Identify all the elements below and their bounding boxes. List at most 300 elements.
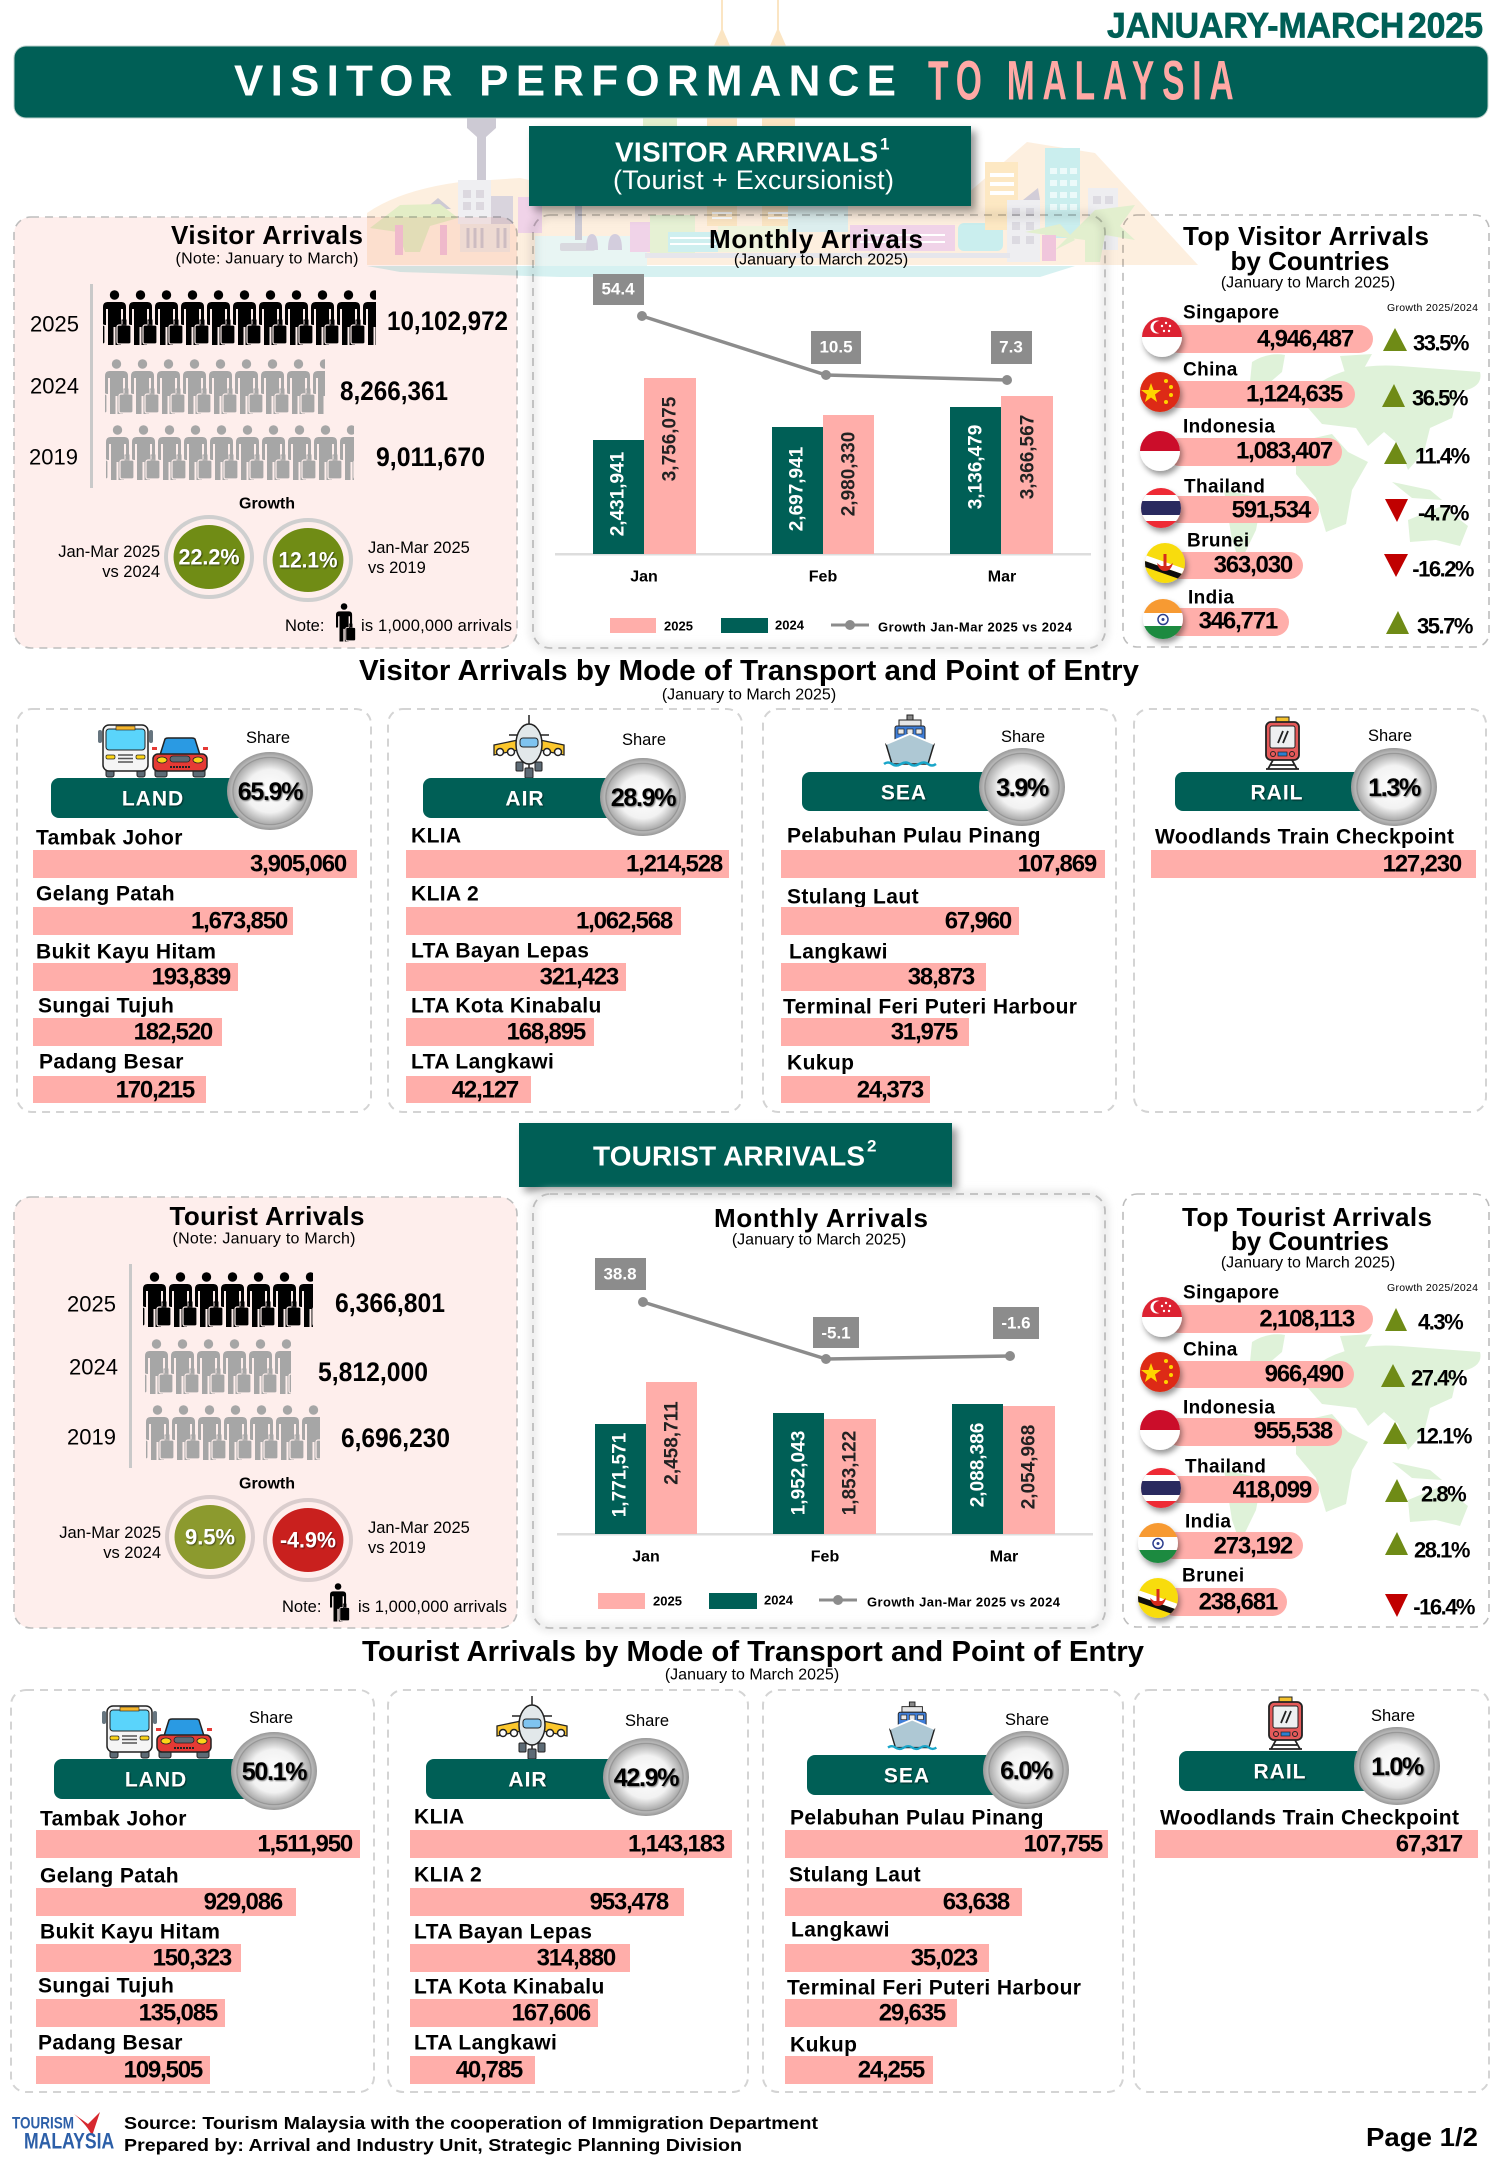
- panel content: visitor arrivals totals: [29, 220, 512, 642]
- icon: train: [1266, 717, 1299, 769]
- list: land entry points: Padang Besar: [39, 1050, 184, 1074]
- row: Thailand: Thailand: [1185, 1456, 1266, 1478]
- growth badges: [58, 496, 470, 600]
- icon: ship: [888, 1702, 936, 1749]
- list: sea entry points: Terminal Feri Puteri Harbour: [787, 1976, 1081, 2000]
- air badge: [426, 1738, 689, 1816]
- world map background: [1224, 1334, 1481, 1543]
- row: 2024 pictogram: 8,266,361: [340, 376, 448, 406]
- rail badge: [1179, 1727, 1440, 1805]
- note: pictogram key: [285, 603, 512, 642]
- list: sea entry points: 35,023: [911, 1944, 978, 1972]
- list: sea entry points: 67,960: [945, 908, 1012, 934]
- growth badges: Jan-Mar 2025: [368, 539, 470, 557]
- section heading: tourist arrivals: [519, 1123, 952, 1187]
- list: air entry points: 42,127: [452, 1076, 519, 1104]
- logo: Tourism Malaysia: MALAYSIA: [24, 2130, 114, 2154]
- panel: visitor sea: Share: [1001, 728, 1045, 746]
- row: Singapore: [1142, 1282, 1463, 1337]
- list: sea entry points: Langkawi: [789, 940, 888, 964]
- row: Indonesia: Indonesia: [1183, 1398, 1275, 1418]
- growth badges: Growth: [239, 1476, 295, 1492]
- source text: [124, 2113, 818, 2155]
- list: sea entry points: Terminal Feri Puteri Harbour: [783, 996, 1077, 1018]
- list: air entry points: LTA Kota Kinabalu: [414, 1976, 605, 1998]
- heading: tourist arrivals by mode: [362, 1636, 1144, 1684]
- row: Brunei: 238,681: [1199, 1588, 1278, 1616]
- rail badge: 1.0%: [1371, 1753, 1424, 1781]
- row: 2024 pictogram: 5,812,000: [318, 1357, 428, 1387]
- list: land entry points: Sungai Tujuh: [38, 1974, 174, 1998]
- list: land entry points: 1,511,950: [257, 1830, 353, 1858]
- row: Thailand: 2.8%: [1421, 1482, 1466, 1506]
- panel: tourist sea: [763, 1690, 1123, 2092]
- list: air entry points: KLIA: [411, 824, 462, 848]
- list: air entry points: 168,895: [507, 1018, 586, 1046]
- title banner: [14, 46, 1488, 118]
- section heading: visitor arrivals: VISITOR ARRIVALS: [615, 136, 878, 168]
- chart: monthly visitor arrivals: Jan: [630, 568, 658, 586]
- growth badges: vs 2019: [368, 1539, 426, 1557]
- chart: monthly tourist arrivals: Feb: [811, 1548, 839, 1566]
- panel content: top visitor countries: [1140, 221, 1478, 640]
- chart: monthly tourist arrivals: Jan: [632, 1548, 660, 1566]
- row: Indonesia: [1140, 1398, 1472, 1450]
- list: land entry points: Sungai Tujuh: [38, 994, 174, 1018]
- legend: Growth Jan-Mar 2025 vs 2024: [878, 620, 1073, 634]
- row: India: India: [1185, 1512, 1231, 1532]
- row: India: 28.1%: [1414, 1538, 1470, 1562]
- page number: Page 1/2: [1366, 2122, 1478, 2152]
- icon: bus and car: [98, 725, 208, 777]
- world map background: [1224, 354, 1481, 563]
- row: 2024 pictogram: 2024: [69, 1354, 118, 1380]
- legend: 2024: [764, 1592, 794, 1608]
- list: air entry points: 167,606: [512, 2000, 591, 2026]
- icon: plane: [494, 715, 564, 778]
- list: sea entry points: Pelabuhan Pulau Pinang: [787, 824, 1041, 848]
- bars: January: 2,458,711: [662, 1401, 682, 1485]
- bars: March: 2,054,968: [1018, 1425, 1040, 1509]
- bars: March: 3,136,479: [966, 425, 986, 509]
- list: air entry points: KLIA 2: [411, 882, 479, 906]
- list: land entry points: Gelang Patah: [36, 882, 175, 906]
- row: Brunei: 363,030: [1214, 552, 1293, 578]
- list: sea entry points: 107,869: [1018, 850, 1097, 878]
- row: Singapore: 4.3%: [1418, 1310, 1463, 1334]
- growth line: [593, 274, 1032, 385]
- row: India: 273,192: [1214, 1532, 1293, 1560]
- growth line: 54.4: [601, 280, 635, 298]
- row: China: China: [1183, 1340, 1238, 1360]
- land badge: [54, 1732, 317, 1810]
- bars: February: 1,853,122: [840, 1431, 860, 1515]
- list: sea entry points: [785, 1806, 1108, 2084]
- panel: visitor land: [17, 709, 371, 1112]
- growth badges: Jan-Mar 2025: [58, 543, 160, 561]
- list: air entry points: 321,423: [540, 964, 619, 990]
- list: rail entry point: Woodlands Train Checkpoint: [1160, 1806, 1459, 1830]
- growth badges: -4.9%: [280, 1528, 336, 1552]
- bars: February: 2,980,330: [838, 432, 860, 516]
- list: land entry points: [36, 1808, 360, 2084]
- row: Brunei: -16.4%: [1413, 1594, 1475, 1620]
- list: air entry points: [406, 824, 729, 1104]
- row: Indonesia: 1,083,407: [1236, 438, 1333, 464]
- note: pictogram key: is 1,000,000 arrivals: [361, 617, 512, 635]
- list: sea entry points: 29,635: [879, 2000, 946, 2026]
- panel: top tourist countries: Top Tourist Arrivals: [1182, 1202, 1432, 1232]
- list: air entry points: 314,880: [537, 1944, 616, 1972]
- land badge: LAND: [122, 788, 184, 810]
- growth line: 10.5: [819, 338, 853, 356]
- legend: 2025: [653, 1594, 682, 1608]
- list: sea entry points: 31,975: [891, 1018, 958, 1046]
- air badge: 28.9%: [611, 784, 676, 812]
- list: air entry points: 1,062,568: [576, 908, 673, 934]
- panel: monthly visitor arrivals background: [533, 215, 1105, 648]
- date heading: JANUARY-MARCH 2025: [1107, 6, 1483, 46]
- sea badge: 6.0%: [1000, 1757, 1053, 1785]
- list: land entry points: Tambak Johor: [40, 1808, 187, 1830]
- icon: train: [1269, 1697, 1302, 1749]
- note: pictogram key: is 1,000,000 arrivals: [358, 1598, 507, 1616]
- panel: top tourist countries: [1123, 1194, 1489, 1627]
- panel: visitor air: Share: [622, 731, 666, 749]
- list: sea entry points: 24,255: [858, 2056, 925, 2084]
- chart: monthly tourist arrivals: (January to March 2025): [732, 1232, 906, 1248]
- section heading: visitor arrivals: (Tourist + Excursionist): [613, 165, 894, 195]
- row: China: 27.4%: [1411, 1366, 1467, 1390]
- row: Singapore: [1142, 302, 1469, 357]
- source text: Prepared by: Arrival and Industry Unit, Strategic Planning Division: [124, 2135, 742, 2155]
- panel: visitor rail: [1134, 709, 1486, 1112]
- row: Singapore: 2,108,113: [1259, 1306, 1355, 1332]
- growth line: -5.1: [821, 1324, 851, 1342]
- section heading: visitor arrivals: [529, 126, 971, 206]
- list: air entry points: 40,785: [456, 2056, 523, 2084]
- bars: February: [773, 1413, 876, 1534]
- row: China: 1,124,635: [1246, 380, 1343, 408]
- list: land entry points: 109,505: [124, 2056, 203, 2084]
- list: air entry points: 953,478: [590, 1888, 669, 1916]
- list: air entry points: LTA Bayan Lepas: [414, 1920, 592, 1944]
- heading: visitor arrivals by mode: (January to March 2025): [662, 686, 836, 704]
- bars: February: [772, 415, 874, 554]
- panel: tourist sea: Share: [1005, 1711, 1049, 1729]
- list: sea entry points: Stulang Laut: [789, 1864, 921, 1886]
- growth badges: vs 2019: [368, 559, 426, 577]
- chart: monthly visitor arrivals: (January to March 2025): [734, 252, 908, 268]
- row: 2025 pictogram: 2025: [30, 312, 79, 336]
- list: air entry points: LTA Bayan Lepas: [411, 940, 589, 962]
- row: Brunei: Brunei: [1182, 1566, 1245, 1586]
- list: land entry points: 150,323: [153, 1944, 232, 1972]
- list: air entry points: 1,143,183: [628, 1830, 725, 1858]
- growth line: 38.8: [603, 1264, 637, 1284]
- air badge: [423, 758, 686, 836]
- sea badge: [807, 1731, 1069, 1809]
- list: land entry points: 1,673,850: [191, 908, 288, 934]
- growth line: [595, 1258, 1039, 1364]
- row: Indonesia: 955,538: [1254, 1418, 1333, 1444]
- panel: top tourist countries: (January to March 2025): [1221, 1254, 1395, 1272]
- list: land entry points: 193,839: [152, 964, 231, 990]
- panel: tourist rail: Share: [1371, 1707, 1415, 1725]
- note: pictogram key: [282, 1583, 507, 1622]
- panel: tourist rail: [1134, 1690, 1489, 2092]
- section heading: visitor arrivals: 1: [880, 134, 889, 154]
- row: China: 966,490: [1265, 1360, 1344, 1388]
- growth badges: 9.5%: [185, 1524, 235, 1550]
- panel content: visitor arrivals totals: Visitor Arrivals: [171, 220, 363, 250]
- chart: monthly tourist arrivals: [533, 1194, 1105, 1628]
- growth badges: 12.1%: [278, 548, 338, 572]
- row: 2024 pictogram: 2024: [30, 374, 79, 398]
- bars: March: [950, 396, 1053, 554]
- heading: visitor arrivals by mode: Visitor Arrivals by Mode of Transport and Point of Entry: [359, 655, 1139, 687]
- row: Indonesia: [1140, 416, 1470, 471]
- growth line: -1.6: [1001, 1314, 1031, 1332]
- land badge: [51, 752, 313, 830]
- panel content: visitor arrivals totals: (Note: January to March): [176, 250, 358, 268]
- sea badge: 3.9%: [996, 774, 1049, 802]
- row: Brunei: Brunei: [1187, 530, 1250, 552]
- bars: March: [952, 1404, 1055, 1534]
- bars: March: 2,088,386: [968, 1423, 988, 1507]
- row: Brunei: [1145, 530, 1474, 583]
- growth badges: vs 2024: [102, 563, 160, 581]
- list: land entry points: Gelang Patah: [40, 1864, 179, 1888]
- row: 2019 pictogram: 2019: [67, 1424, 116, 1450]
- row: Singapore: 4,946,487: [1257, 326, 1354, 352]
- row: Brunei: -16.2%: [1412, 556, 1474, 582]
- list: rail entry point: Woodlands Train Checkpoint: [1155, 826, 1454, 848]
- sea badge: [802, 748, 1065, 826]
- title banner: TO MALAYSIA: [928, 48, 1241, 112]
- row: 2025 pictogram: 10,102,972: [387, 306, 508, 336]
- note: pictogram key: Note:: [285, 617, 324, 635]
- row: China: China: [1183, 360, 1238, 380]
- panel content: top visitor countries: by Countries: [1230, 246, 1390, 276]
- panel: top tourist countries: by Countries: [1231, 1226, 1389, 1256]
- rail badge: 1.3%: [1368, 774, 1421, 802]
- list: land entry points: 182,520: [134, 1018, 213, 1046]
- row: 2025 pictogram: 2025: [67, 1292, 116, 1316]
- panel content: top visitor countries: Top Visitor Arrivals: [1183, 221, 1429, 251]
- growth line: 7.3: [999, 338, 1023, 356]
- row: Thailand: Thailand: [1184, 476, 1265, 498]
- row: 2025 pictogram: [30, 290, 508, 346]
- panel: tourist arrivals totals: (Note: January to March): [172, 1230, 356, 1248]
- row: Thailand: -4.7%: [1418, 500, 1469, 526]
- bars: March: 3,366,567: [1018, 415, 1038, 499]
- growth badges: Jan-Mar 2025: [368, 1519, 470, 1537]
- list: rail entry point: 67,317: [1396, 1830, 1463, 1858]
- panel: visitor rail: Share: [1368, 727, 1412, 745]
- panel: tourist land: Share: [249, 1709, 293, 1727]
- list: land entry points: 3,905,060: [250, 850, 347, 878]
- panel: tourist air: Share: [625, 1712, 669, 1730]
- list: air entry points: LTA Langkawi: [414, 2032, 557, 2054]
- panel: top visitor countries background: [1123, 215, 1489, 647]
- chart: monthly visitor arrivals: Monthly Arrivals: [709, 224, 923, 254]
- row: India: 35.7%: [1417, 614, 1473, 638]
- row: China: 36.5%: [1412, 386, 1468, 410]
- panel: visitor sea: [763, 709, 1116, 1112]
- row: India: [1143, 588, 1473, 640]
- list: sea entry points: Pelabuhan Pulau Pinang: [790, 1806, 1044, 1830]
- bars: January: [595, 1382, 697, 1534]
- list: land entry points: [33, 826, 357, 1104]
- row: 2019 pictogram: [29, 425, 485, 481]
- icon: ship: [884, 715, 936, 766]
- panel: visitor land: Share: [246, 729, 290, 747]
- sea badge: SEA: [881, 782, 927, 804]
- heading: tourist arrivals by mode: (January to March 2025): [665, 1666, 839, 1684]
- air badge: AIR: [508, 1768, 548, 1792]
- row: Indonesia: 12.1%: [1416, 1424, 1472, 1448]
- legend: 2025: [664, 618, 693, 634]
- list: air entry points: LTA Kota Kinabalu: [411, 994, 602, 1018]
- row: Singapore: 33.5%: [1413, 330, 1469, 356]
- row: Singapore: Singapore: [1183, 1282, 1280, 1304]
- row: Indonesia: Indonesia: [1183, 416, 1275, 438]
- row: 2019 pictogram: 2019: [29, 444, 78, 470]
- row: 2024 pictogram: [69, 1339, 428, 1395]
- list: air entry points: 1,214,528: [626, 850, 723, 878]
- legend: [610, 618, 1073, 634]
- row: India: [1138, 1512, 1470, 1564]
- growth badges: Growth: [239, 496, 295, 512]
- growth badges: [59, 1476, 470, 1580]
- list: sea entry points: 38,873: [908, 964, 975, 990]
- list: sea entry points: Stulang Laut: [787, 886, 919, 908]
- chart: monthly visitor arrivals: [555, 224, 1091, 634]
- panel: tourist air: [388, 1690, 748, 2092]
- growth badges: vs 2024: [103, 1544, 161, 1562]
- chart: monthly visitor arrivals: Mar: [988, 568, 1016, 586]
- list: land entry points: 929,086: [204, 1888, 283, 1916]
- illustration: Kuala Lumpur skyline: [367, 0, 1198, 277]
- row: Singapore: Singapore: [1183, 302, 1280, 324]
- list: land entry points: Tambak Johor: [36, 826, 183, 850]
- list: land entry points: Bukit Kayu Hitam: [36, 940, 216, 964]
- list: rail entry point: [1151, 826, 1476, 878]
- list: rail entry point: [1155, 1806, 1478, 1858]
- section heading: tourist arrivals: 2: [867, 1136, 876, 1156]
- list: sea entry points: [781, 824, 1105, 1104]
- row: Thailand: [1141, 1456, 1466, 1508]
- land badge: 50.1%: [242, 1758, 307, 1786]
- panel content: top visitor countries: Growth 2025/2024: [1387, 302, 1478, 314]
- logo: Tourism Malaysia: [12, 2112, 114, 2154]
- panel: visitor arrivals background: [14, 217, 517, 648]
- legend: [598, 1592, 1061, 1610]
- row: 2019 pictogram: 9,011,670: [376, 442, 485, 472]
- row: Thailand: [1141, 476, 1469, 528]
- rail badge: [1175, 748, 1437, 826]
- panel: tourist arrivals totals: [14, 1197, 517, 1628]
- heading: tourist arrivals by mode: Tourist Arrivals by Mode of Transport and Point of Entry: [362, 1636, 1144, 1668]
- row: India: India: [1188, 588, 1234, 608]
- legend: 2024: [775, 618, 805, 632]
- list: air entry points: LTA Langkawi: [411, 1050, 554, 1074]
- source text: Source: Tourism Malaysia with the cooperation of Immigration Department: [124, 2113, 818, 2133]
- rail badge: RAIL: [1254, 1760, 1306, 1784]
- land badge: LAND: [125, 1768, 187, 1792]
- list: land entry points: 170,215: [116, 1076, 195, 1104]
- bars: February: 2,697,941: [786, 446, 808, 531]
- growth badges: 22.2%: [178, 544, 240, 570]
- chart: monthly tourist arrivals: Monthly Arrivals: [714, 1203, 928, 1233]
- list: sea entry points: Langkawi: [791, 1918, 890, 1942]
- row: India: 346,771: [1199, 608, 1278, 634]
- panel: top tourist countries: Growth 2025/2024: [1387, 1282, 1478, 1294]
- land badge: 65.9%: [238, 778, 303, 806]
- panel: tourist arrivals totals: Tourist Arrivals: [170, 1201, 364, 1231]
- row: China: [1140, 1340, 1467, 1392]
- title banner: VISITOR PERFORMANCE: [234, 56, 896, 106]
- bars: January: 2,431,941: [608, 451, 628, 536]
- air badge: 42.9%: [614, 1764, 679, 1792]
- bars: January: 1,771,571: [610, 1432, 630, 1517]
- list: sea entry points: Kukup: [787, 1052, 854, 1074]
- row: Thailand: 418,099: [1233, 1476, 1312, 1504]
- air badge: AIR: [505, 788, 545, 810]
- bars: January: 3,756,075: [660, 396, 680, 481]
- chart: monthly tourist arrivals: Mar: [990, 1548, 1018, 1566]
- row: China: [1140, 360, 1468, 412]
- row: 2024 pictogram: [30, 359, 448, 415]
- chart: monthly visitor arrivals: Feb: [809, 568, 837, 586]
- panel: tourist land: [11, 1690, 374, 2092]
- row: 2025 pictogram: 6,366,801: [335, 1288, 445, 1318]
- list: sea entry points: 107,755: [1024, 1830, 1103, 1858]
- rail badge: RAIL: [1250, 782, 1304, 804]
- list: sea entry points: 24,373: [857, 1076, 924, 1104]
- bars: January: [593, 378, 696, 554]
- icon: plane: [497, 1696, 567, 1759]
- section heading: tourist arrivals: TOURIST ARRIVALS: [593, 1140, 865, 1172]
- sea badge: SEA: [884, 1764, 930, 1788]
- heading: visitor arrivals by mode: [359, 655, 1139, 704]
- list: land entry points: 135,085: [139, 2000, 218, 2026]
- list: sea entry points: Kukup: [790, 2034, 857, 2056]
- bars: February: 1,952,043: [788, 1431, 810, 1515]
- growth badges: Jan-Mar 2025: [59, 1524, 161, 1542]
- note: pictogram key: Note:: [282, 1598, 321, 1616]
- list: air entry points: KLIA: [414, 1806, 465, 1828]
- panel content: top visitor countries: (January to March 2025): [1221, 274, 1395, 292]
- logo: Tourism Malaysia: TOURISM: [12, 2114, 74, 2132]
- row: 2019 pictogram: 6,696,230: [341, 1423, 450, 1453]
- panel: visitor air: [388, 709, 742, 1112]
- row: 2019 pictogram: [67, 1405, 450, 1461]
- list: land entry points: Padang Besar: [38, 2032, 183, 2054]
- row: 2025 pictogram: [67, 1272, 445, 1328]
- list: land entry points: Bukit Kayu Hitam: [40, 1920, 220, 1944]
- row: Indonesia: 11.4%: [1415, 444, 1470, 468]
- list: sea entry points: 63,638: [943, 1888, 1010, 1916]
- icon: bus and car: [102, 1706, 212, 1758]
- row: Brunei: [1138, 1566, 1475, 1620]
- row: Thailand: 591,534: [1232, 496, 1312, 524]
- list: air entry points: [410, 1806, 732, 2084]
- list: air entry points: KLIA 2: [414, 1864, 482, 1886]
- list: rail entry point: 127,230: [1383, 850, 1462, 878]
- legend: Growth Jan-Mar 2025 vs 2024: [867, 1594, 1061, 1610]
